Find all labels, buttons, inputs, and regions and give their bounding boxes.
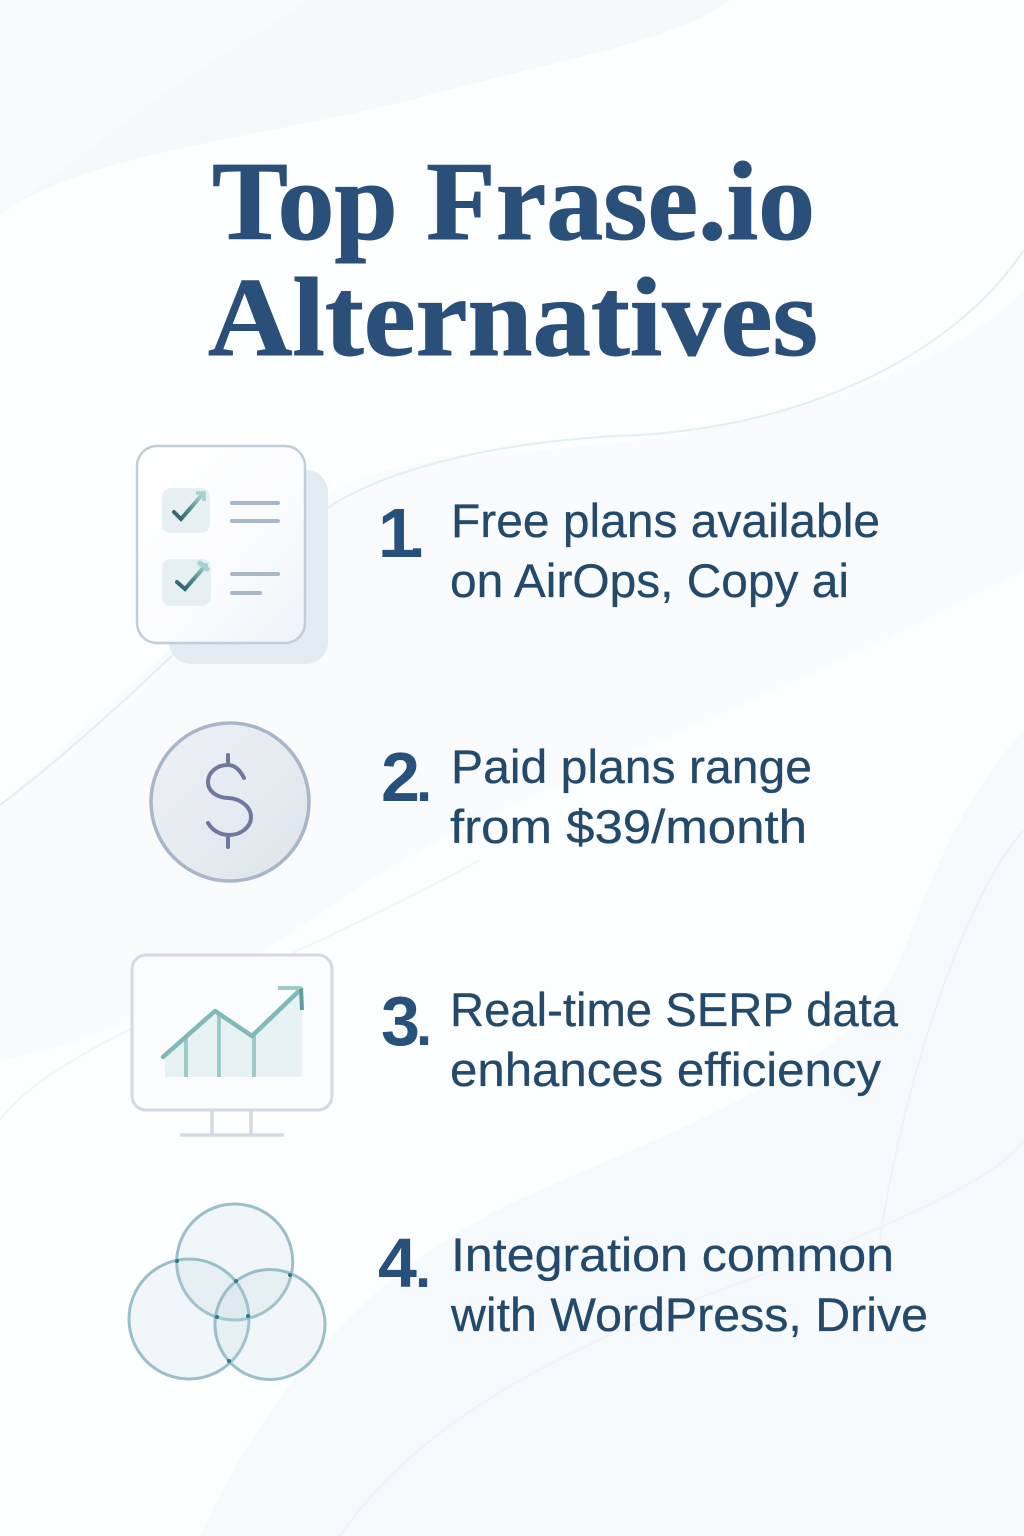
text 1 <box>450 494 880 607</box>
title: Top Frase.io <box>212 140 815 264</box>
icon: checklist document <box>137 446 328 664</box>
text 1: Free plans available <box>451 494 880 547</box>
text 4: Integration common <box>451 1228 894 1281</box>
icon: overlapping circles <box>129 1204 325 1380</box>
text 2 <box>450 740 812 853</box>
text 3 <box>450 983 899 1096</box>
item 2: paid plans <box>151 723 812 881</box>
text 4 <box>450 1228 928 1341</box>
icon: monitor with chart <box>132 955 332 1135</box>
number 2: 2. <box>381 738 432 816</box>
title <box>208 140 818 380</box>
text 2: Paid plans range <box>451 740 812 793</box>
text 1: on AirOps, Copy ai <box>450 554 849 607</box>
number 3: 3. <box>381 982 432 1060</box>
text 3: enhances efficiency <box>450 1043 882 1096</box>
number 1: 1. <box>378 494 425 572</box>
number 4: 4. <box>378 1224 431 1302</box>
text 2: from $39/month <box>450 800 807 853</box>
item 3: real-time data <box>132 955 899 1135</box>
icon: dollar coin <box>151 723 309 881</box>
text 4: with WordPress, Drive <box>450 1288 928 1341</box>
text 3: Real-time SERP data <box>450 983 899 1036</box>
item 1: free plans <box>137 446 880 664</box>
item 4: integrations <box>129 1204 928 1380</box>
title: Alternatives <box>208 256 818 380</box>
